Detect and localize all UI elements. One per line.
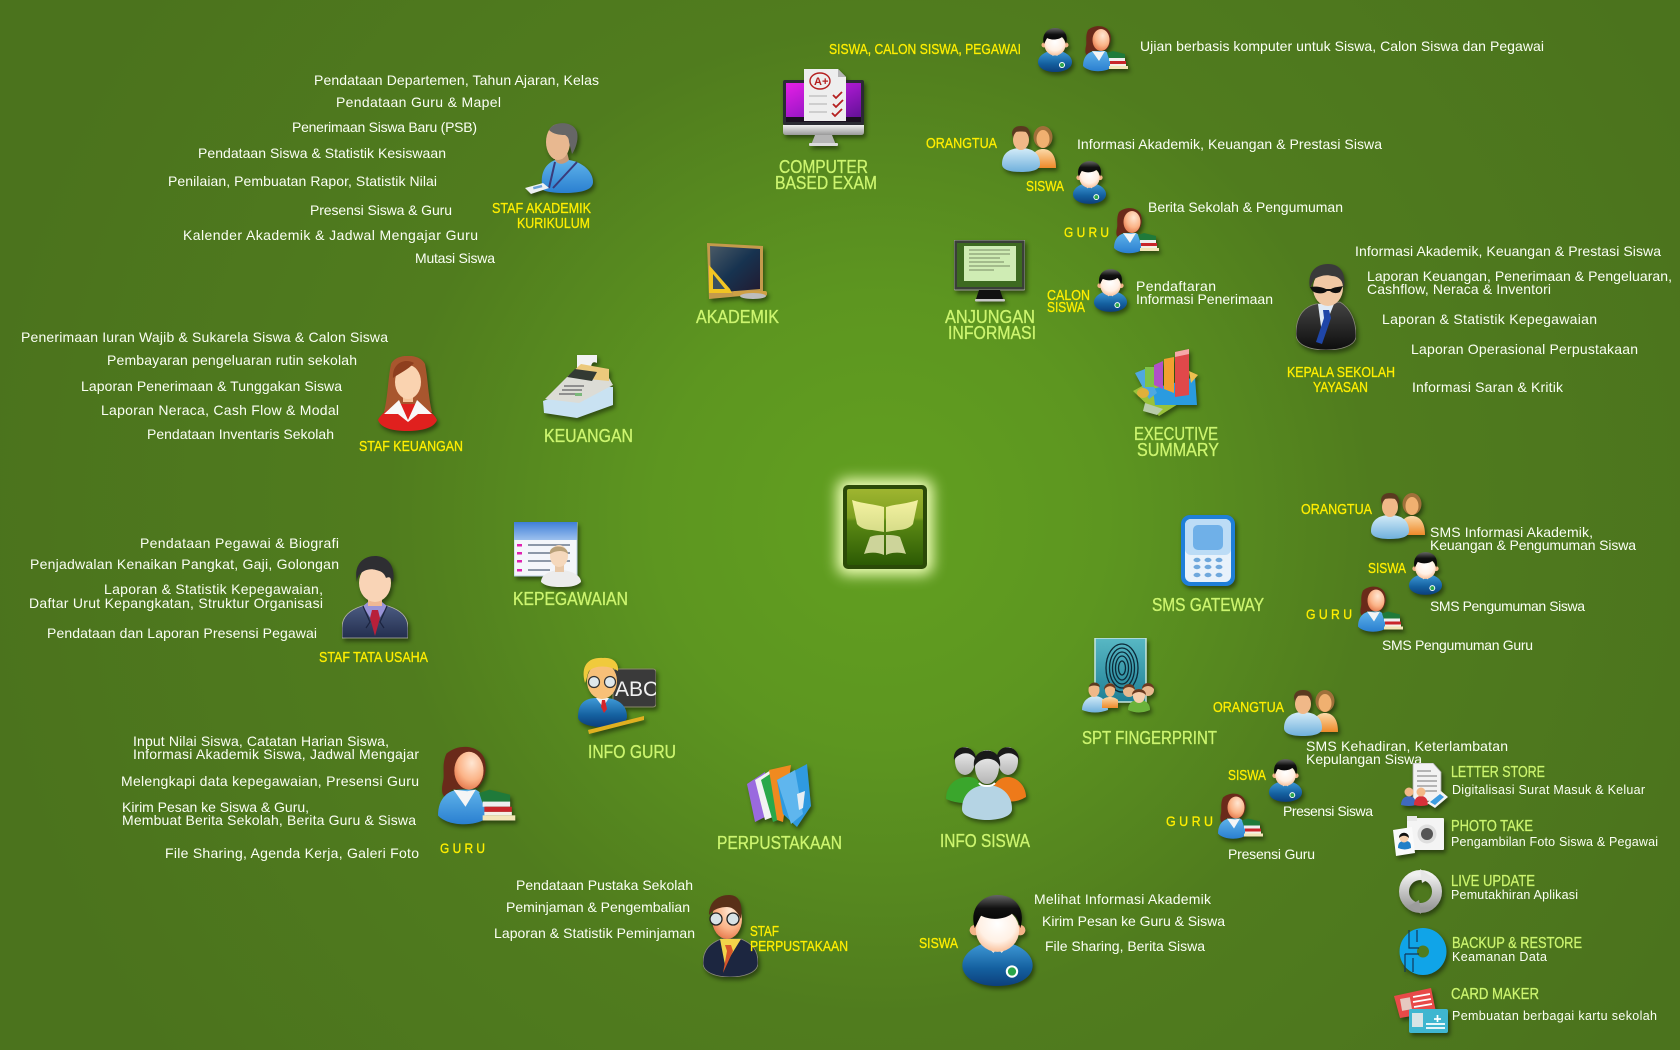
- role label: guru: G U R U: [440, 841, 485, 856]
- panel: sms gateway: [1152, 493, 1636, 653]
- icon: students group: [946, 747, 1026, 820]
- role label: staf tata usaha: STAF TATA USAHA: [319, 649, 428, 666]
- text block: perpustakaan features: [494, 877, 695, 941]
- text block: siswa features: [1034, 891, 1225, 954]
- description: orangtua: Informasi Akademik, Keuangan & Prestasi Siswa: [1077, 136, 1382, 152]
- tool: letter store: Digitalisasi Surat Masuk & Keluar: [1452, 783, 1645, 797]
- text block: akademik features: Mutasi Siswa: [415, 250, 495, 266]
- icon: anjungan monitor: [954, 240, 1025, 302]
- tool: photo take: PHOTO TAKE: [1451, 818, 1533, 835]
- description: ujian: Ujian berbasis komputer untuk Siswa, Calon Siswa dan Pegawai: [1140, 38, 1544, 54]
- text block: guru features: Input Nilai Siswa, Catatan Harian Siswa,: [133, 733, 389, 749]
- heading: computer based exam: [775, 156, 877, 193]
- tool: live update: LIVE UPDATE: [1451, 873, 1535, 890]
- text block: akademik features: Kalender Akademik & Jadwal Mengajar Guru: [183, 227, 478, 243]
- tool: photo take: Pengambilan Foto Siswa & Pegawai: [1451, 835, 1658, 849]
- panel: computer based exam: [775, 26, 1544, 193]
- text block: keuangan features: [21, 329, 388, 442]
- icon: siswa large: [962, 895, 1033, 986]
- text block: kepala sekolah features: Laporan Operasional Perpustakaan: [1411, 341, 1638, 357]
- description: guru: Berita Sekolah & Pengumuman: [1148, 199, 1343, 215]
- role label: kepala sekolah yayasan: [1287, 364, 1395, 396]
- text block: akademik features: [168, 72, 599, 266]
- text block: akademik features: Penilaian, Pembuatan Rapor, Statistik Nilai: [168, 173, 437, 189]
- heading: perpustakaan: PERPUSTAKAAN: [717, 832, 842, 853]
- icon: staf akademik: [525, 123, 593, 194]
- icon: chalkboard: [707, 243, 767, 299]
- icon: staf tata usaha: [342, 556, 408, 638]
- text block: guru features: [121, 733, 419, 861]
- role label: staf keuangan: STAF KEUANGAN: [359, 438, 463, 455]
- tool: card maker: [1394, 986, 1657, 1033]
- text block: kepala sekolah features: Informasi Akademik, Keuangan & Prestasi Siswa: [1355, 243, 1661, 259]
- description: calon siswa: Pendaftaran: [1136, 278, 1216, 294]
- heading: executive summary: SUMMARY: [1137, 439, 1219, 460]
- text block: kepala sekolah features: Laporan & Statistik Kepegawaian: [1382, 311, 1597, 327]
- tool: backup and restore: BACKUP & RESTORE: [1452, 935, 1582, 952]
- icon: cash register: [543, 355, 613, 418]
- text block: kepegawaian features: Daftar Urut Kepangkatan, Struktur Organisasi: [29, 595, 323, 611]
- description: calon siswa: Informasi Penerimaan: [1136, 291, 1273, 307]
- icon: guru: [1358, 587, 1403, 632]
- text block: keuangan features: Pendataan Inventaris Sekolah: [147, 426, 334, 442]
- role label: staf perpustakaan: PERPUSTAKAAN: [750, 938, 848, 955]
- role label: staf perpustakaan: [750, 923, 848, 955]
- text block: keuangan features: Pembayaran pengeluaran rutin sekolah: [107, 352, 357, 368]
- heading: computer based exam: COMPUTER: [779, 156, 868, 177]
- heading: info siswa: INFO SISWA: [940, 830, 1031, 851]
- role label: guru: G U R U: [1306, 607, 1352, 622]
- text block: guru features: File Sharing, Agenda Kerja, Galeri Foto: [165, 845, 419, 861]
- icon: kepala sekolah: [1296, 264, 1356, 350]
- panel: tools: [1393, 763, 1658, 1033]
- text block: kepegawaian features: Pendataan Pegawai & Biografi: [140, 535, 339, 551]
- role label: siswa: SISWA: [1228, 767, 1266, 784]
- heading: info guru: INFO GURU: [588, 741, 676, 762]
- icon: guru: [438, 747, 515, 824]
- description: orangtua: SMS Kehadiran, Keterlambatan: [1306, 738, 1508, 754]
- heading: anjungan informasi: [945, 306, 1036, 343]
- tool: letter store: LETTER STORE: [1451, 764, 1545, 781]
- text block: guru features: Informasi Akademik Siswa, Jadwal Mengajar: [133, 746, 419, 762]
- description: guru: SMS Pengumuman Guru: [1382, 637, 1533, 653]
- description: orangtua: [1306, 738, 1508, 767]
- text block: perpustakaan features: Peminjaman & Pengembalian: [506, 899, 690, 915]
- icon: orangtua: [1371, 493, 1425, 539]
- text block: kepala sekolah features: Laporan Keuangan, Penerimaan & Pengeluaran,: [1367, 268, 1672, 284]
- heading: executive summary: [1134, 423, 1219, 460]
- role label: siswa: SISWA: [1368, 560, 1406, 577]
- icon: phone: [1181, 515, 1235, 586]
- icon: chart: [1133, 349, 1198, 416]
- tool: live update: Pemutakhiran Aplikasi: [1451, 888, 1578, 902]
- text block: kepala sekolah features: Cashflow, Neraca & Inventori: [1367, 281, 1551, 297]
- heading: executive summary: EXECUTIVE: [1134, 423, 1218, 444]
- role label: staf akademik kurikulum: [492, 200, 591, 232]
- panel: info guru: [121, 658, 676, 861]
- tool: card maker: Pembuatan berbagai kartu sekolah: [1452, 1009, 1657, 1023]
- text block: kepegawaian features: Laporan & Statistik Kepegawaian,: [104, 581, 323, 597]
- tool: backup and restore: Keamanan Data: [1452, 950, 1547, 964]
- text block: kepegawaian features: Pendataan dan Laporan Presensi Pegawai: [47, 625, 317, 641]
- role label: staf akademik kurikulum: KURIKULUM: [517, 215, 590, 232]
- panel: keuangan: [21, 329, 633, 455]
- description: siswa: Presensi Siswa: [1283, 803, 1373, 819]
- description: calon siswa: [1136, 278, 1273, 307]
- role label: siswa: SISWA: [1026, 178, 1064, 195]
- role label: orangtua: ORANGTUA: [1301, 501, 1372, 518]
- role label: guru: G U R U: [1064, 225, 1109, 240]
- text block: akademik features: Pendataan Departemen, Tahun Ajaran, Kelas: [314, 72, 599, 88]
- icon: guru: [1083, 26, 1128, 71]
- tool: photo take: [1393, 816, 1658, 856]
- text block: guru features: Membuat Berita Sekolah, Berita Guru & Siswa: [122, 812, 416, 828]
- panel: spt fingerprint: [1082, 638, 1508, 862]
- text block: guru features: Melengkapi data kepegawaian, Presensi Guru: [121, 773, 419, 789]
- icon: siswa: [1269, 759, 1302, 802]
- text block: perpustakaan features: Laporan & Statistik Peminjaman: [494, 925, 695, 941]
- icon: books: [747, 764, 811, 827]
- panel: info siswa: [919, 747, 1225, 986]
- role label: staf perpustakaan: STAF: [750, 923, 779, 940]
- central logo: [837, 479, 933, 575]
- panel: anjungan informasi: [926, 126, 1382, 343]
- text block: perpustakaan features: Pendataan Pustaka Sekolah: [516, 877, 693, 893]
- heading: akademik: AKADEMIK: [696, 306, 780, 327]
- panel: perpustakaan: [494, 764, 848, 977]
- heading: sms gateway: SMS GATEWAY: [1152, 594, 1264, 615]
- heading: anjungan informasi: ANJUNGAN: [945, 306, 1035, 327]
- text block: siswa features: Kirim Pesan ke Guru & Siswa: [1042, 913, 1225, 929]
- icon: staf keuangan: [378, 356, 437, 431]
- text block: akademik features: Pendataan Siswa & Statistik Kesiswaan: [198, 145, 446, 161]
- text block: keuangan features: Laporan Neraca, Cash Flow & Modal: [101, 402, 339, 418]
- heading: anjungan informasi: INFORMASI: [948, 322, 1036, 343]
- icon: guru: [1218, 794, 1263, 839]
- role label: calon siswa: CALON: [1047, 287, 1090, 304]
- icon: siswa: [1038, 28, 1072, 72]
- role label: guru: G U R U: [1166, 814, 1213, 829]
- text block: siswa features: File Sharing, Berita Siswa: [1045, 938, 1205, 954]
- role label: siswa, calon siswa, pegawai: SISWA, CALON SISWA, PEGAWAI: [829, 41, 1021, 58]
- tool: letter store: [1401, 763, 1645, 808]
- icon: staf perpustakaan: [703, 895, 758, 977]
- description: orangtua: [1430, 524, 1636, 553]
- role label: calon siswa: [1047, 287, 1090, 316]
- text block: kepegawaian features: [29, 535, 339, 641]
- panel: executive summary: [1133, 243, 1672, 460]
- icon: guru: [1114, 208, 1159, 253]
- description: orangtua: SMS Informasi Akademik,: [1430, 524, 1593, 540]
- heading: keuangan: KEUANGAN: [544, 425, 633, 446]
- text block: kepala sekolah features: [1355, 243, 1672, 395]
- icon: orangtua: [1284, 690, 1338, 736]
- icon: employee window: [514, 522, 581, 587]
- role label: kepala sekolah yayasan: YAYASAN: [1313, 379, 1368, 396]
- role label: staf akademik kurikulum: STAF AKADEMIK: [492, 200, 591, 217]
- text block: guru features: Kirim Pesan ke Siswa & Guru,: [122, 799, 309, 815]
- icon: info guru: [578, 658, 658, 734]
- tool: card maker: CARD MAKER: [1451, 986, 1539, 1003]
- heading: computer based exam: BASED EXAM: [775, 172, 877, 193]
- icon: orangtua: [1002, 126, 1056, 172]
- text block: keuangan features: Penerimaan Iuran Wajib & Sukarela Siswa & Calon Siswa: [21, 329, 388, 345]
- panel: kepegawaian: [29, 522, 628, 666]
- description: guru: Presensi Guru: [1228, 846, 1315, 862]
- text block: akademik features: Presensi Siswa & Guru: [310, 202, 452, 218]
- role label: siswa: SISWA: [919, 935, 958, 952]
- icon: computer exam: [783, 69, 864, 146]
- panel: akademik: [168, 72, 780, 327]
- text block: akademik features: Pendataan Guru & Mapel: [336, 94, 501, 110]
- text block: kepegawaian features: Penjadwalan Kenaikan Pangkat, Gaji, Golongan: [30, 556, 339, 572]
- role label: kepala sekolah yayasan: KEPALA SEKOLAH: [1287, 364, 1395, 381]
- icon: siswa: [1409, 552, 1442, 595]
- heading: kepegawaian: KEPEGAWAIAN: [513, 588, 628, 609]
- heading: spt fingerprint: SPT FINGERPRINT: [1082, 727, 1217, 748]
- role label: orangtua: ORANGTUA: [926, 135, 997, 152]
- text block: kepala sekolah features: Informasi Saran & Kritik: [1412, 379, 1564, 395]
- description: orangtua: Keuangan & Pengumuman Siswa: [1430, 537, 1636, 553]
- role label: orangtua: ORANGTUA: [1213, 699, 1284, 716]
- icon: siswa: [1073, 161, 1106, 204]
- tool: backup and restore: [1400, 928, 1582, 975]
- description: orangtua: Kepulangan Siswa: [1306, 751, 1422, 767]
- text block: akademik features: Penerimaan Siswa Baru (PSB): [292, 119, 477, 135]
- description: siswa: SMS Pengumuman Siswa: [1430, 598, 1585, 614]
- role label: calon siswa: SISWA: [1047, 299, 1085, 316]
- icon: fingerprint: [1082, 638, 1154, 712]
- text block: keuangan features: Laporan Penerimaan & Tunggakan Siswa: [81, 378, 342, 394]
- icon: calon siswa: [1094, 269, 1127, 312]
- tool: live update: [1404, 869, 1578, 914]
- text block: siswa features: Melihat Informasi Akademik: [1034, 891, 1212, 907]
